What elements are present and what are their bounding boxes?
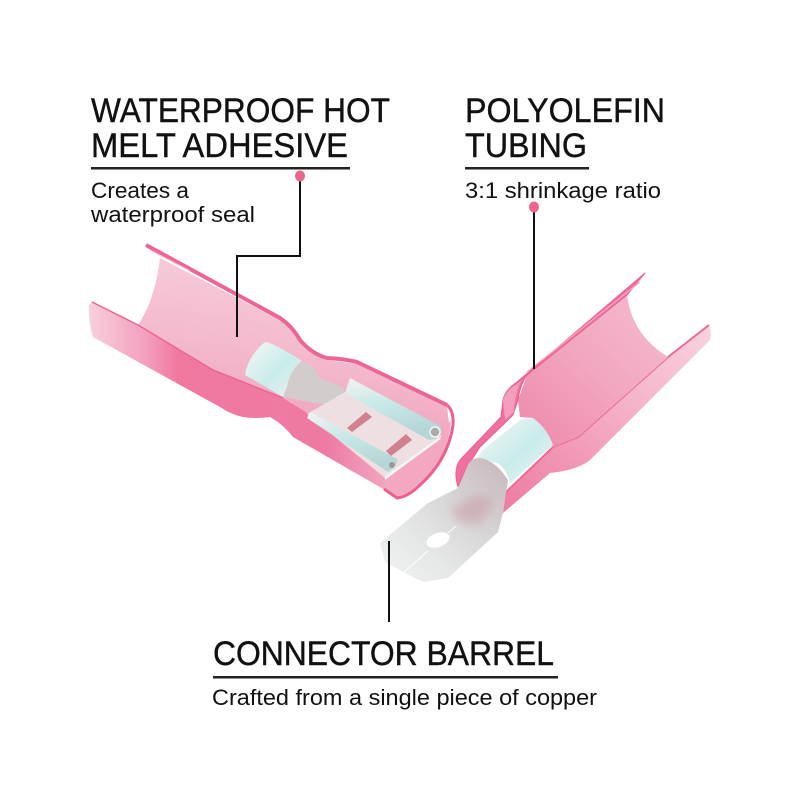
- text: creates a waterproof seal: Creates a: [91, 178, 190, 203]
- lower rail: [307, 412, 397, 472]
- heading: waterproof hot melt adhesive: [91, 92, 390, 170]
- heading: waterproof hot melt adhesive: MELT ADHESIVE: [91, 127, 348, 165]
- heading: polyolefin tubing: POLYOLEFIN: [465, 92, 665, 130]
- spade terminal: [380, 458, 508, 582]
- text: crafted from copper: Crafted from a single piece of copper: [212, 685, 597, 710]
- crimp barrel: [245, 342, 302, 397]
- front wall: [89, 302, 385, 490]
- text: shrinkage ratio: 3:1 shrinkage ratio: [465, 178, 661, 203]
- leader line: barrel: [388, 541, 390, 622]
- right male connector: [380, 273, 711, 582]
- left female connector: [89, 245, 453, 498]
- terminal floor: [307, 392, 440, 478]
- crimp barrel: [477, 418, 553, 483]
- text: creates a waterproof seal: waterproof seal: [90, 202, 255, 227]
- leader line: adhesive: [237, 170, 305, 337]
- back wall: [138, 258, 450, 470]
- crimp interior: [283, 362, 345, 405]
- tube mouth: [385, 420, 451, 497]
- heading: polyolefin tubing: [465, 92, 665, 170]
- heading: polyolefin tubing: TUBING: [465, 127, 587, 165]
- leader line: tubing: [529, 202, 539, 369]
- spade hole: [424, 529, 452, 551]
- back wall: [518, 295, 668, 447]
- front wall: [503, 325, 711, 513]
- blade edge: [385, 438, 440, 478]
- top rim: [456, 273, 645, 487]
- upper rail: [345, 378, 442, 440]
- crimp pink shading: [450, 495, 495, 525]
- text: creates a waterproof seal: [90, 178, 255, 227]
- top rim: [146, 245, 447, 405]
- heading: connector barrel: CONNECTOR BARREL: [213, 635, 554, 673]
- heading: waterproof hot melt adhesive: WATERPROOF HOT: [91, 92, 390, 130]
- terminal slots: [347, 412, 412, 456]
